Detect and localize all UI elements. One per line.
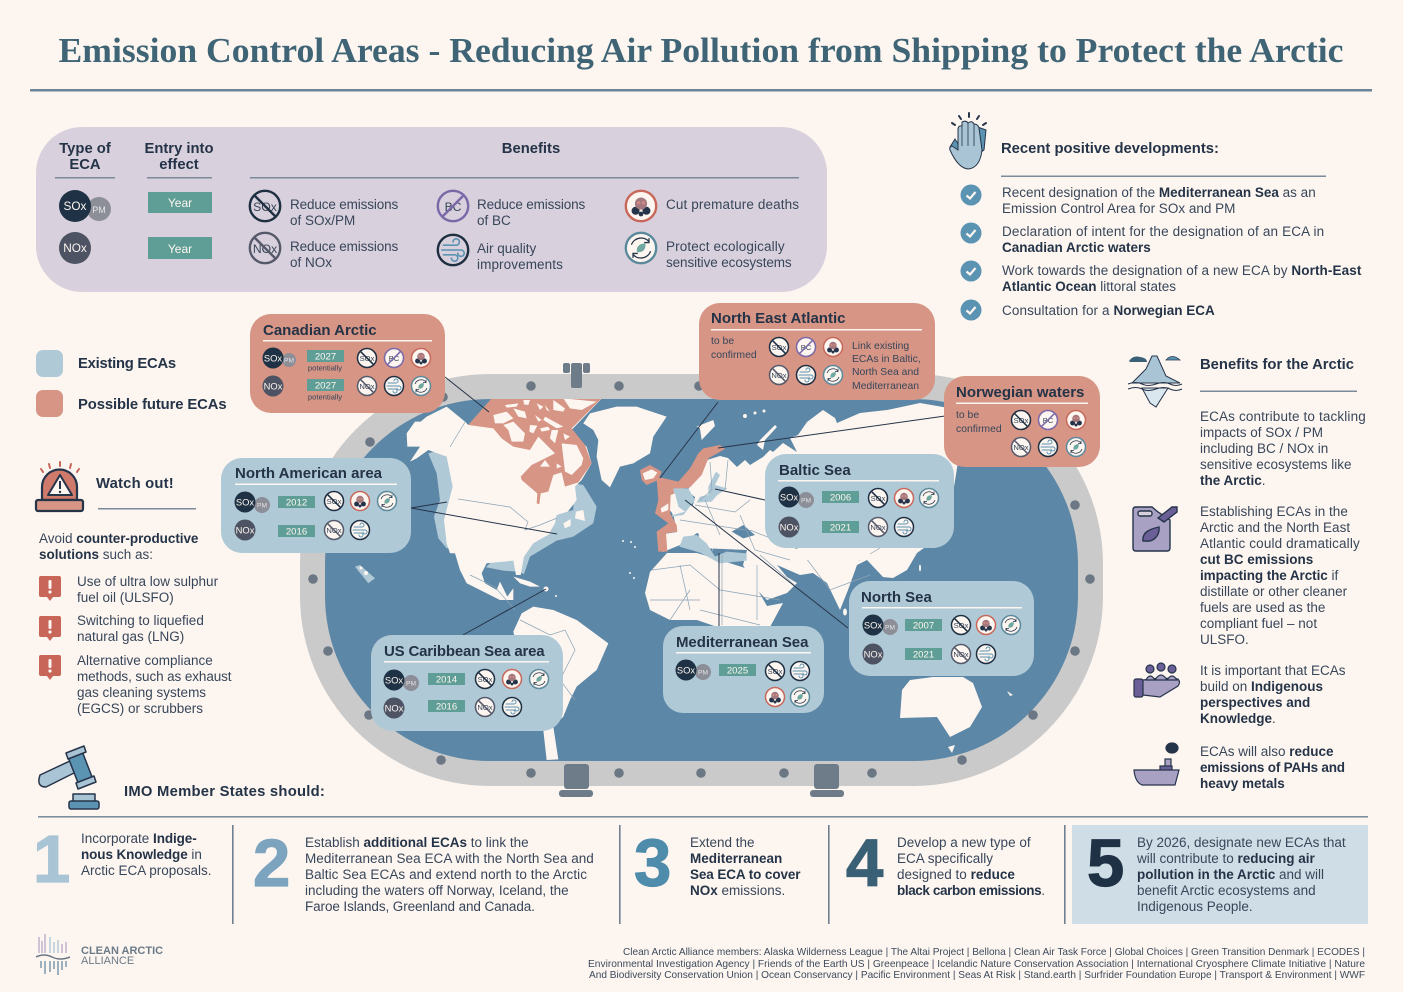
- panel: US Caribbean Sea area: SOx: [478, 675, 493, 684]
- legend: possible future ECAs: Possible future ECAs: [78, 397, 226, 413]
- panel: North Sea: 2021: [913, 650, 934, 660]
- panel: Norwegian waters: to be: [956, 410, 979, 421]
- panel: North American area: PM: [257, 502, 267, 510]
- legend: possible future ECAs: [36, 390, 226, 417]
- recommendation 1: Incorporate: [81, 831, 153, 846]
- ship cleats: [559, 363, 844, 797]
- panel: North Sea: 2007: [913, 620, 934, 632]
- panel: legend of ECA types and benefits: [36, 127, 827, 292]
- icon: reduce BC: [438, 191, 468, 221]
- icon: reduce SOx: [250, 191, 280, 221]
- heading: Watch out: Watch out!: [96, 476, 174, 492]
- badge: SOx PM: SOx: [64, 199, 87, 213]
- panel: Mediterranean Sea: [663, 626, 824, 713]
- panel: North Sea: North Sea: [861, 589, 933, 606]
- panel: Canadian Arctic: potentially: [308, 392, 342, 402]
- text: reduce SOx/PM: Reduce emissions: [290, 197, 398, 212]
- panel: Canadian Arctic: PM: [284, 358, 294, 364]
- panel: North East Atlantic: SOx: [772, 343, 787, 352]
- panel: US Caribbean Sea area: NOx: [385, 702, 404, 714]
- recommendation 5: [1072, 825, 1368, 924]
- icon: reduce SOx: SOx: [253, 200, 277, 214]
- item: Canadian Arctic declaration: [960, 222, 1324, 255]
- heading: IMO Member States should: IMO Member States should:: [124, 784, 325, 800]
- recommendation 1: Arctic ECA proposals.: [81, 863, 212, 878]
- recommendation 2: [253, 826, 594, 914]
- text: avoid counter-productive solutions: such as:: [99, 547, 153, 562]
- logo: Clean Arctic Alliance: CLEAN ARCTIC: [81, 945, 163, 957]
- text: cut BC emissions: if: [1328, 568, 1338, 583]
- text: cut BC emissions: ULSFO.: [1200, 632, 1249, 647]
- item: North-East Atlantic: [960, 260, 1362, 294]
- text: tackling impacts: ECAs contribute to tackling: [1200, 409, 1366, 424]
- panel: Norwegian waters: confirmed: [956, 424, 1002, 435]
- logo: Clean Arctic Alliance: ALLIANCE: [81, 955, 134, 967]
- panel: Canadian Arctic: 2027: [315, 380, 336, 392]
- panel: Norwegian waters: NOx: [1013, 443, 1029, 452]
- recommendation 4: reduce: [971, 867, 1015, 882]
- recommendation 5: 5: [1087, 826, 1124, 901]
- recommendation 2: additional ECAs to link the: [364, 835, 529, 850]
- text: tackling impacts: the Arctic: [1200, 473, 1262, 488]
- land: Australia and small islands: [743, 410, 1013, 753]
- text: Indigenous perspectives: .: [1272, 711, 1276, 726]
- text: PAHs and heavy metals: reduce: [1289, 744, 1334, 759]
- icon: gavel: [39, 746, 99, 809]
- recommendation 3: 3: [634, 826, 671, 901]
- recommendation 5: reducing air: [1238, 851, 1316, 866]
- recommendation 1: Indige-: [153, 831, 197, 846]
- icon: reduce NOx: [250, 233, 280, 263]
- footer: alliance members: And Biodiversity Conservation Union | Ocean Conservancy | Pacific Environment | Seas At Risk | Stand.earth | Surfrider Foundation Europe | Transport & Environment | WWF: [589, 970, 1365, 981]
- logo: Clean Arctic Alliance: [36, 934, 163, 975]
- existing ECA waters, North America: [355, 451, 597, 583]
- badge: NOx: [59, 232, 91, 264]
- islands: Hawaii and Caribbean: [360, 540, 636, 597]
- text: cut BC emissions: impacting the Arctic: [1200, 568, 1328, 583]
- recommendation 2: 2: [253, 826, 290, 901]
- icon: reduce NOx: NOx: [253, 242, 277, 256]
- panel: Mediterranean Sea: Mediterranean Sea: [676, 634, 809, 651]
- panel: Baltic Sea: 2006: [830, 492, 851, 504]
- existing and possible ECA waters: Europe: [640, 445, 755, 563]
- text: tackling impacts: .: [1262, 473, 1266, 488]
- icon: alarm beacon: [36, 462, 83, 511]
- text: cut BC emissions: Arctic and the North East: [1200, 520, 1350, 535]
- panel: US Caribbean Sea area: 2014: [436, 674, 458, 686]
- heading: entry into effect: effect: [159, 157, 199, 173]
- warning item: scrubbers: [39, 653, 232, 716]
- text: PAHs and heavy metals: emissions of PAHs and: [1200, 760, 1345, 775]
- icon: fuel can: [1133, 507, 1177, 551]
- panel: Canadian Arctic: potentially: [308, 364, 342, 372]
- panel: North Sea: NOx: [953, 650, 969, 659]
- icon: hand holding people: [1134, 663, 1180, 697]
- recommendation 4: black carbon emissions: [897, 883, 1041, 898]
- recommendation 4: ECA specifically: [897, 851, 993, 866]
- recommendation 2: Baltic Sea ECAs and extend north to the Arctic: [305, 867, 587, 882]
- text: PAHs and heavy metals: ECAs will also: [1200, 744, 1289, 759]
- panel: North American area: NOx: [236, 524, 255, 536]
- item: Mediterranean Sea designation: Recent designation of the: [1002, 185, 1159, 200]
- item: North-East Atlantic: Atlantic Ocean: [1002, 279, 1097, 294]
- panel: benefits for the Arctic: [1128, 356, 1366, 791]
- text: cut BC emissions: fuels are used as the: [1200, 600, 1325, 615]
- panel: North East Atlantic: BC: [801, 343, 812, 352]
- recommendation 5: pollution in the Arctic: [1137, 867, 1276, 882]
- text: reduce BC: of BC: [477, 213, 511, 228]
- recommendation 5: and will: [1275, 867, 1324, 882]
- panel: Baltic Sea: SOx: [780, 492, 798, 502]
- footer: alliance members: Clean Arctic Alliance members: Alaska Wilderness League | The Altai Project | Bellona | Clean Air Task Force | Global Choices | Green Transition Denmark | ECODES |: [623, 947, 1365, 958]
- warning item: ULSFO: fuel oil (ULSFO): [77, 590, 174, 605]
- panel: Canadian Arctic: NOx: [359, 382, 375, 391]
- text: air quality: improvements: [477, 257, 563, 272]
- item: Norwegian ECA: Consultation for a: [1002, 303, 1113, 318]
- panel: Canadian Arctic: 2027: [315, 352, 336, 362]
- text: avoid counter-productive solutions: counter-productive: [76, 531, 199, 546]
- recommendation 4: .: [1041, 883, 1045, 898]
- text: tackling impacts: impacts of SOx / PM: [1200, 425, 1323, 440]
- land: North America and Arctic islands: [407, 399, 715, 600]
- panel: Watch out: [36, 462, 232, 716]
- text: cut BC emissions: cut BC emissions: [1200, 552, 1313, 567]
- panel: US Caribbean Sea area: NOx: [477, 703, 493, 712]
- text: Indigenous perspectives: perspectives and: [1200, 695, 1310, 710]
- recommendation 5: benefit Arctic ecosystems and: [1137, 883, 1316, 898]
- land: Africa: [645, 553, 783, 650]
- panel: Mediterranean Sea: SOx: [768, 667, 783, 676]
- recommendation 3: [634, 826, 801, 901]
- panel: Norwegian waters: Norwegian waters: [956, 384, 1084, 401]
- text: protect ecosystems: sensitive ecosystems: [666, 255, 792, 270]
- year tag: [148, 192, 212, 213]
- item: Norwegian ECA: Norwegian ECA: [1113, 303, 1215, 318]
- item: Norwegian ECA: [960, 300, 1215, 320]
- recommendation 4: 4: [846, 826, 883, 901]
- warning item: ULSFO: [39, 574, 219, 605]
- world map porthole: [300, 363, 1103, 797]
- panel: Canadian Arctic: BC: [389, 354, 400, 363]
- text: protect ecosystems: Protect ecologically: [666, 239, 785, 254]
- item: North-East Atlantic: Work towards the designation of a new ECA by: [1002, 263, 1291, 278]
- panel: North American area: 2016: [286, 526, 307, 538]
- panel: Baltic Sea: 2021: [830, 522, 851, 534]
- panel: Mediterranean Sea: PM: [698, 670, 708, 676]
- panel: North American area: North American area: [235, 465, 383, 482]
- warning item: LNG: Switching to liquefied: [77, 613, 204, 628]
- heading: type of ECA: Type of: [59, 141, 111, 157]
- text: cut BC emissions: Establishing ECAs in the: [1200, 504, 1348, 519]
- St Lawrence: [550, 510, 574, 532]
- panel: Baltic Sea: NOx: [870, 523, 886, 532]
- text: Indigenous perspectives: Knowledge: [1200, 711, 1272, 726]
- heading: recent positive developments: Recent positive developments:: [1001, 141, 1219, 157]
- panel: Mediterranean Sea: 2025: [727, 666, 748, 676]
- recommendation 4: Develop a new type of: [897, 835, 1031, 850]
- panel: Baltic Sea: Baltic Sea: [779, 462, 851, 479]
- panel: North East Atlantic: to be: [711, 336, 734, 347]
- legend: existing ECAs: [36, 350, 176, 377]
- text: air quality: Air quality: [477, 241, 537, 256]
- text: Indigenous perspectives: It is important that ECAs: [1200, 663, 1346, 678]
- panel: North Sea: SOx: [864, 620, 882, 630]
- legend: existing ECAs: Existing ECAs: [78, 356, 176, 372]
- panel: North Sea: [849, 581, 1034, 676]
- recommendation 3: Sea ECA to cover: [690, 867, 801, 882]
- warning item: LNG: [39, 613, 204, 644]
- possible future ECA: Canadian Arctic: [468, 398, 602, 535]
- panel: Norwegian waters: BC: [1043, 416, 1054, 425]
- recommendation 2: Faroe Islands, Greenland and Canada.: [305, 899, 535, 914]
- panel: US Caribbean Sea area: 2016: [436, 702, 457, 712]
- heading: entry into effect: Entry into: [144, 141, 214, 157]
- panel: North East Atlantic: NOx: [771, 371, 787, 380]
- recommendation 1: [33, 822, 212, 897]
- title: Emission Control Areas - Reducing Air Pollution from Shipping to Protect the Arctic: [58, 31, 1344, 70]
- icon: cut premature deaths: [626, 191, 656, 221]
- text: cut BC emissions: compliant fuel – not: [1200, 616, 1317, 631]
- panel: North East Atlantic: North Sea and: [852, 367, 919, 378]
- recommendation 5: will contribute to: [1136, 851, 1238, 866]
- recommendation 4: [846, 826, 1045, 901]
- panel: North East Atlantic: North East Atlantic: [711, 310, 845, 327]
- recommendation 3: Mediterranean: [690, 851, 782, 866]
- text: PAHs and heavy metals: heavy metals: [1200, 776, 1285, 791]
- icon: air quality: [438, 235, 468, 265]
- recommendation 2: Mediterranean Sea ECA with the North Sea and: [305, 851, 594, 866]
- panel: North East Atlantic: confirmed: [711, 350, 757, 361]
- text: tackling impacts: including BC / NOx in: [1200, 441, 1328, 456]
- panel: Baltic Sea: NOx: [780, 522, 799, 532]
- warning item: scrubbers: gas cleaning systems: [77, 685, 206, 700]
- panel: US Caribbean Sea area: [371, 635, 563, 731]
- icon: reduce BC: BC: [445, 200, 462, 214]
- panel: Norwegian waters: SOx: [1014, 416, 1029, 425]
- year tag: Year: [168, 242, 192, 256]
- heading: benefits: Benefits: [502, 141, 560, 157]
- recommendation 3: NOx: [690, 883, 718, 898]
- warning item: LNG: natural gas (LNG): [77, 629, 184, 644]
- panel: US Caribbean Sea area: PM: [406, 680, 416, 688]
- recommendation 5: Indigenous People.: [1137, 899, 1253, 914]
- heading: benefits for the Arctic: Benefits for the Arctic: [1200, 357, 1354, 373]
- panel: North East Atlantic: [699, 303, 935, 400]
- panel: North American area: SOx: [327, 497, 342, 506]
- text: cut BC emissions: distillate or other cleaner: [1200, 584, 1348, 599]
- badge: SOx PM: PM: [92, 205, 106, 215]
- item: North-East Atlantic: North-East: [1291, 263, 1362, 278]
- panel: North Sea: PM: [885, 624, 895, 632]
- year tag: [148, 237, 212, 259]
- recommendation 4: designed to: [897, 867, 971, 882]
- icon: protect ecosystems: [626, 233, 656, 263]
- icon: iceberg: [1128, 356, 1182, 407]
- recommendation 3: emissions.: [718, 883, 785, 898]
- panel: US Caribbean Sea area: US Caribbean Sea area: [384, 643, 545, 660]
- recommendation 1: in: [188, 847, 202, 862]
- panel: North Sea: NOx: [864, 648, 883, 660]
- panel: Baltic Sea: PM: [801, 498, 811, 504]
- warning item: scrubbers: methods, such as exhaust: [77, 669, 232, 684]
- item: Canadian Arctic declaration: Declaration of intent for the designation of an ECA in: [1002, 224, 1324, 239]
- item: North-East Atlantic: littoral states: [1097, 279, 1176, 294]
- year tag: Year: [168, 196, 192, 210]
- text: Indigenous perspectives: Indigenous: [1251, 679, 1323, 694]
- panel: North East Atlantic: Link existing: [852, 341, 909, 352]
- panel: Canadian Arctic: Canadian Arctic: [263, 322, 377, 339]
- recommendation 2: including the waters off Norway, Iceland, the: [305, 883, 569, 898]
- recommendation 3: Extend the: [690, 835, 755, 850]
- panel: Canadian Arctic: NOx: [264, 380, 283, 392]
- land: South America: [513, 607, 608, 760]
- panel: Baltic Sea: SOx: [871, 494, 886, 503]
- panel: Canadian Arctic: [250, 314, 445, 413]
- panel: Norwegian waters: [944, 376, 1100, 467]
- item: Canadian Arctic declaration: Canadian Arctic waters: [1002, 240, 1151, 255]
- text: Indigenous perspectives: build on: [1200, 679, 1251, 694]
- panel: recent positive developments: [950, 113, 1362, 320]
- land: northern Siberia: [800, 440, 930, 453]
- connector lines: [411, 377, 945, 635]
- country borders: [450, 422, 910, 720]
- panel: North East Atlantic: ECAs in Baltic,: [852, 354, 921, 365]
- land: central Asia: [790, 549, 870, 560]
- warning item: scrubbers: Alternative compliance: [77, 653, 213, 668]
- panel: Baltic Sea: [765, 454, 954, 548]
- badge: SOx PM: [59, 190, 111, 222]
- panel: North American area: 2012: [286, 498, 307, 508]
- footer: alliance members: [588, 947, 1365, 981]
- ring bolts: [308, 381, 1095, 778]
- recommendation 2: Establish: [305, 835, 364, 850]
- icon: ship with smoke: [1134, 743, 1179, 785]
- panel: North American area: NOx: [326, 526, 342, 535]
- panel: North American area: [221, 458, 411, 553]
- panel: US Caribbean Sea area: SOx: [385, 674, 403, 686]
- text: reduce NOx: of NOx: [290, 255, 332, 270]
- panel: North East Atlantic: Mediterranean: [852, 381, 919, 392]
- warning item: scrubbers: (EGCS) or scrubbers: [77, 701, 203, 716]
- recommendation 1: nous Knowledge: [81, 847, 188, 862]
- badge: NOx: NOx: [63, 241, 87, 255]
- text: avoid counter-productive solutions: solutions: [39, 547, 99, 562]
- item: Mediterranean Sea designation: Emission Control Area for SOx and PM: [1002, 201, 1235, 216]
- panel: Canadian Arctic: SOx: [360, 354, 375, 363]
- panel: Canadian Arctic: SOx: [264, 352, 282, 364]
- footer: alliance members: Environmental Investigation Agency | Friends of the Earth US | Greenpeace | Icelandic Nature Conservation Association | International Cryosphere Climate Initiative | Nature: [588, 959, 1365, 970]
- text: avoid counter-productive solutions: Avoid: [39, 531, 76, 546]
- text: reduce SOx/PM: of SOx/PM: [290, 213, 355, 228]
- heading: type of ECA: ECA: [69, 157, 101, 173]
- text: cut BC emissions: Atlantic could dramatically: [1200, 536, 1360, 551]
- icon: clapping hands: [950, 113, 986, 169]
- land: Eurasia: [662, 403, 958, 610]
- text: reduce BC: Reduce emissions: [477, 197, 585, 212]
- text: tackling impacts: sensitive ecosystems like: [1200, 457, 1352, 472]
- panel: North American area: SOx: [236, 496, 254, 508]
- panel: Mediterranean Sea: SOx: [677, 664, 695, 676]
- text: cut premature deaths: Cut premature deaths: [666, 197, 799, 212]
- item: Mediterranean Sea designation: [960, 184, 1316, 216]
- recommendation 5: By 2026, designate new ECAs that: [1137, 835, 1346, 850]
- panel: North Sea: SOx: [954, 621, 969, 630]
- recommendation 1: 1: [33, 822, 70, 897]
- item: Mediterranean Sea designation: Mediterranean Sea as an: [1159, 185, 1316, 200]
- text: reduce NOx: Reduce emissions: [290, 239, 398, 254]
- warning item: ULSFO: Use of ultra low sulphur: [77, 574, 219, 589]
